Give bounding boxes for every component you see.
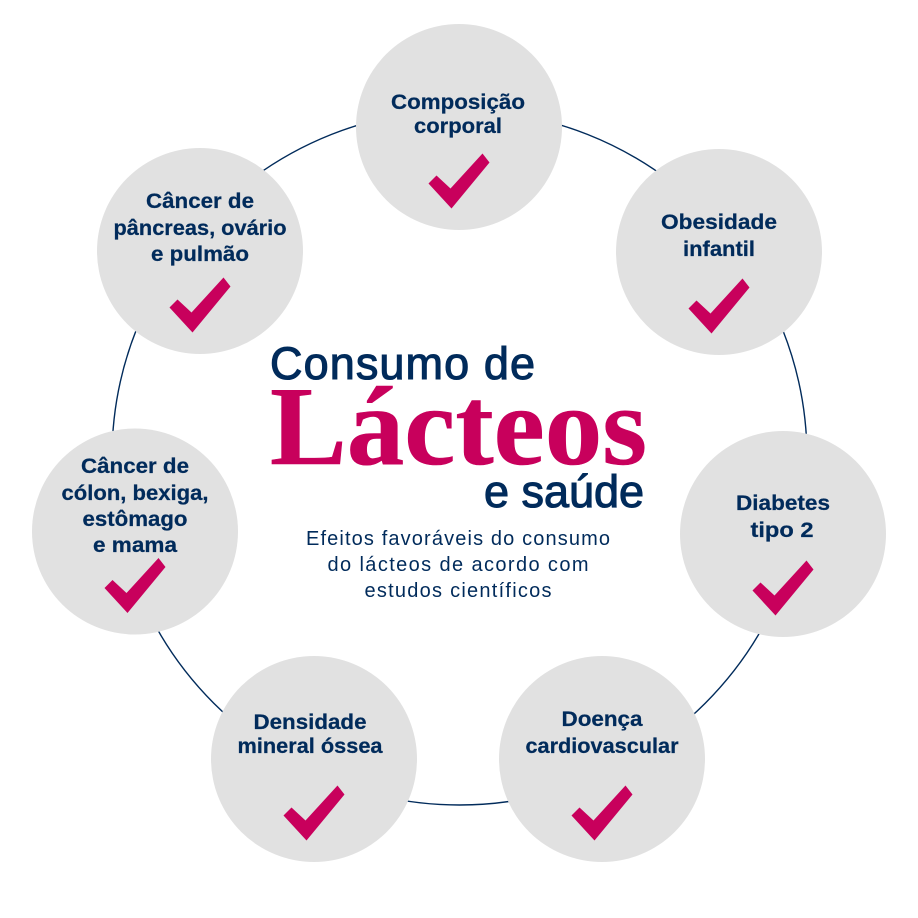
title	[270, 338, 647, 517]
title: Consumo de	[270, 338, 535, 389]
panel: Obesidade infantil: infantil	[683, 237, 755, 261]
panel: Doença cardiovascular	[499, 656, 705, 862]
panel: Obesidade infantil	[616, 149, 822, 355]
panel: Câncer de pâncreas, ovário e pulmão: e pulmão	[151, 242, 249, 266]
title: e saúde	[484, 466, 644, 517]
panel: Câncer de cólon, bexiga, estômago e mama: cólon, bexiga,	[62, 481, 208, 505]
panel: Câncer de pâncreas, ovário e pulmão: Câncer de	[146, 189, 254, 213]
panel: Diabetes tipo 2	[680, 431, 886, 637]
panel: Densidade mineral óssea: Densidade	[254, 710, 367, 734]
panel: Diabetes tipo 2: Diabetes	[736, 491, 830, 515]
panel: Composição corporal: corporal	[414, 114, 502, 138]
panel: Câncer de cólon, bexiga, estômago e mama: e mama	[93, 533, 178, 557]
panel: Câncer de pâncreas, ovário e pulmão	[97, 148, 303, 354]
subtitle text: estudos científicos	[364, 580, 552, 602]
subtitle text: Efeitos favoráveis do consumo	[306, 528, 610, 550]
panel: Doença cardiovascular: Doença	[562, 707, 644, 731]
panel: Obesidade infantil: Obesidade	[661, 210, 777, 234]
connecting ring	[112, 110, 807, 805]
panel: Densidade mineral óssea	[211, 656, 417, 862]
subtitle text: do lácteos de acordo com	[328, 554, 588, 576]
panel: Câncer de pâncreas, ovário e pulmão: pâncreas, ovário	[114, 216, 286, 240]
panel: Densidade mineral óssea: mineral óssea	[238, 734, 384, 758]
panel: Câncer de cólon, bexiga, estômago e mama	[32, 428, 238, 634]
panel: Câncer de cólon, bexiga, estômago e mama: estômago	[82, 507, 188, 531]
panel: Composição corporal	[356, 24, 562, 230]
panel: Diabetes tipo 2: tipo 2	[750, 518, 814, 542]
panel: Câncer de cólon, bexiga, estômago e mama: Câncer de	[81, 454, 189, 478]
panel: Doença cardiovascular: cardiovascular	[526, 734, 679, 758]
panel: Composição corporal: Composição	[391, 90, 525, 114]
title: Lácteos	[270, 365, 647, 489]
subtitle text	[306, 528, 610, 602]
